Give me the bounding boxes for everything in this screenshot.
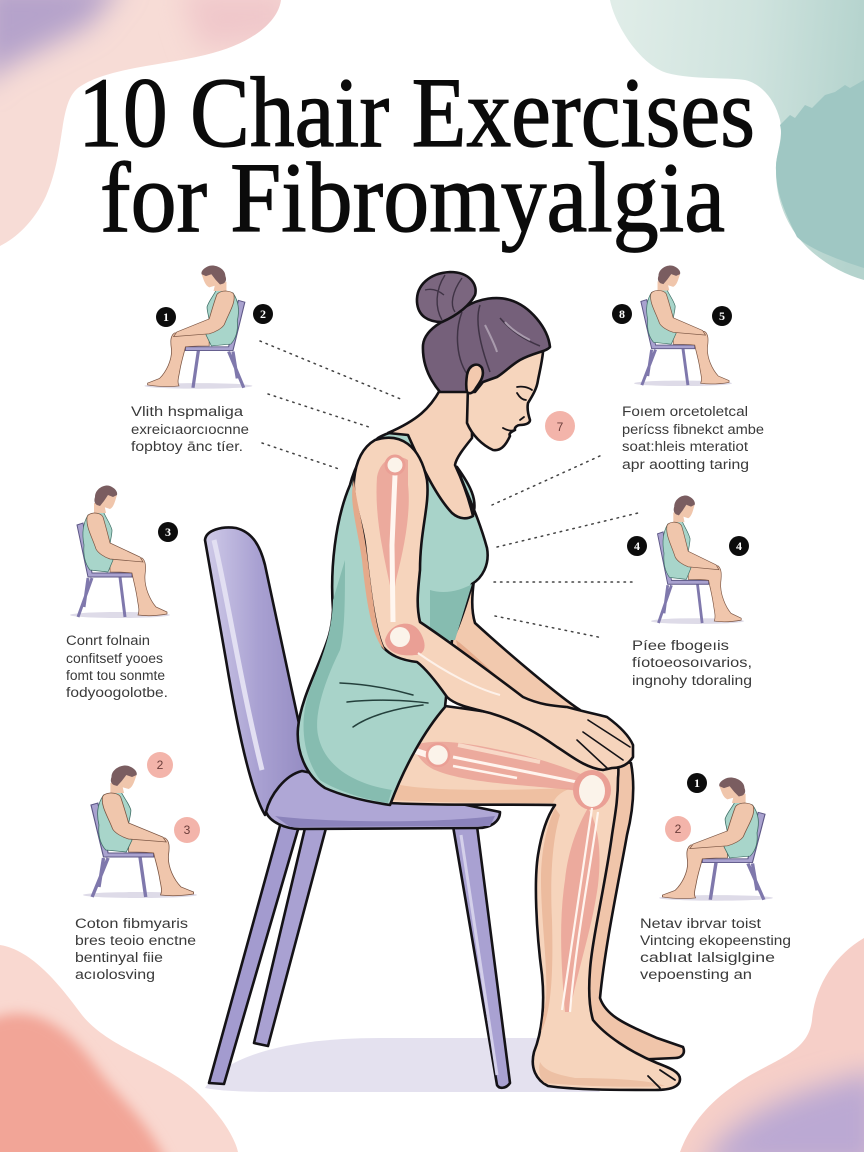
badges: 3 [184, 823, 191, 837]
background wash: bottom right [680, 938, 864, 1152]
near arm [354, 438, 633, 770]
text block: top right [622, 404, 764, 472]
background wash: top left [0, 0, 290, 246]
exercise figure 3 [70, 486, 170, 618]
title: for Fibromyalgia [100, 142, 725, 253]
floor shadow [205, 1038, 600, 1092]
badges: 2 [675, 822, 682, 836]
text block: middle left: confitsetf yooes [66, 651, 163, 666]
text block: bottom left: bentinyal fiie [75, 950, 163, 965]
title: 10 Chair Exercises [78, 57, 755, 168]
text block: middle right: ingnohy tdoraling [632, 673, 752, 688]
badges: 3 [165, 525, 171, 539]
text block: middle left [66, 633, 168, 700]
exercise figure 4 [651, 496, 744, 624]
text block: top left: exreicıaorcıocnne [131, 422, 249, 437]
badges: 8 [619, 307, 625, 321]
text block: middle left: fomt tou sonmte [66, 668, 165, 683]
badges: 4 [736, 539, 742, 553]
dress wrinkles [340, 683, 428, 727]
text block: middle right: fíotoeosoıvarios, [632, 655, 752, 670]
head [467, 335, 543, 450]
text block: bottom right: Vintcing ekopeensting [640, 933, 791, 948]
exercise figure 6 [659, 778, 773, 901]
text block: bottom right: Netav ibrvar toist [640, 916, 761, 931]
text block: middle right: Píee fbogeıis [632, 638, 729, 653]
hair [417, 272, 550, 392]
text block: top left: fopbtoy ānc tíer. [131, 439, 243, 454]
badges: 5 [719, 309, 725, 323]
badges [147, 304, 749, 843]
badges: 2 [157, 758, 164, 772]
text block: top right: Foıem orcetoletcal [622, 404, 748, 419]
shin anatomy overlay [561, 808, 600, 1012]
chair [205, 528, 510, 1088]
exercise figure 8 [634, 266, 732, 386]
exercise figure 1 [144, 266, 252, 389]
exercise figure 5 [83, 766, 197, 898]
text block: top left: Vlith hspmaliga [131, 404, 244, 419]
text block: middle left: Conrt folnain [66, 633, 150, 648]
main illustration: seated woman on chair [205, 272, 684, 1092]
text block: bottom left: Coton fibmyaris [75, 916, 188, 931]
ear [466, 365, 483, 393]
badges: 4 [634, 539, 640, 553]
dotted leader lines [260, 341, 638, 638]
face features [503, 387, 532, 431]
hair bun [417, 272, 476, 322]
text block: bottom left: acıolosving [75, 967, 155, 982]
far arm [451, 580, 580, 735]
text block: bottom right [640, 916, 791, 982]
neck and chest [388, 390, 473, 518]
badges: 1 [694, 776, 700, 790]
badges: 7 [557, 420, 564, 434]
near leg [390, 706, 680, 1090]
text block: top right: perícss fibnekct ambe [622, 422, 764, 437]
background wash: top right [610, 0, 864, 280]
arm anatomy overlay [376, 456, 500, 695]
background wash: bottom left [0, 945, 238, 1152]
far leg [560, 760, 684, 1060]
text block: top right: apr aootting taring [622, 457, 749, 472]
text block: bottom left [75, 916, 196, 982]
text block: bottom right: cablıat lalsiglgine [640, 950, 775, 965]
text block: middle right [632, 638, 752, 688]
text block: top right: soat:hleis mteratiot [622, 439, 748, 454]
text block: bottom right: vepoensting an [640, 967, 752, 982]
badges: 2 [260, 307, 266, 321]
text block: bottom left: bres teoio enctne [75, 933, 196, 948]
dress [298, 432, 488, 805]
badges: 1 [163, 310, 169, 324]
thigh anatomy overlay [413, 742, 611, 810]
text block: middle left: fodyoogolotbe. [66, 685, 168, 700]
title [78, 57, 755, 253]
text block: top left [131, 404, 249, 454]
